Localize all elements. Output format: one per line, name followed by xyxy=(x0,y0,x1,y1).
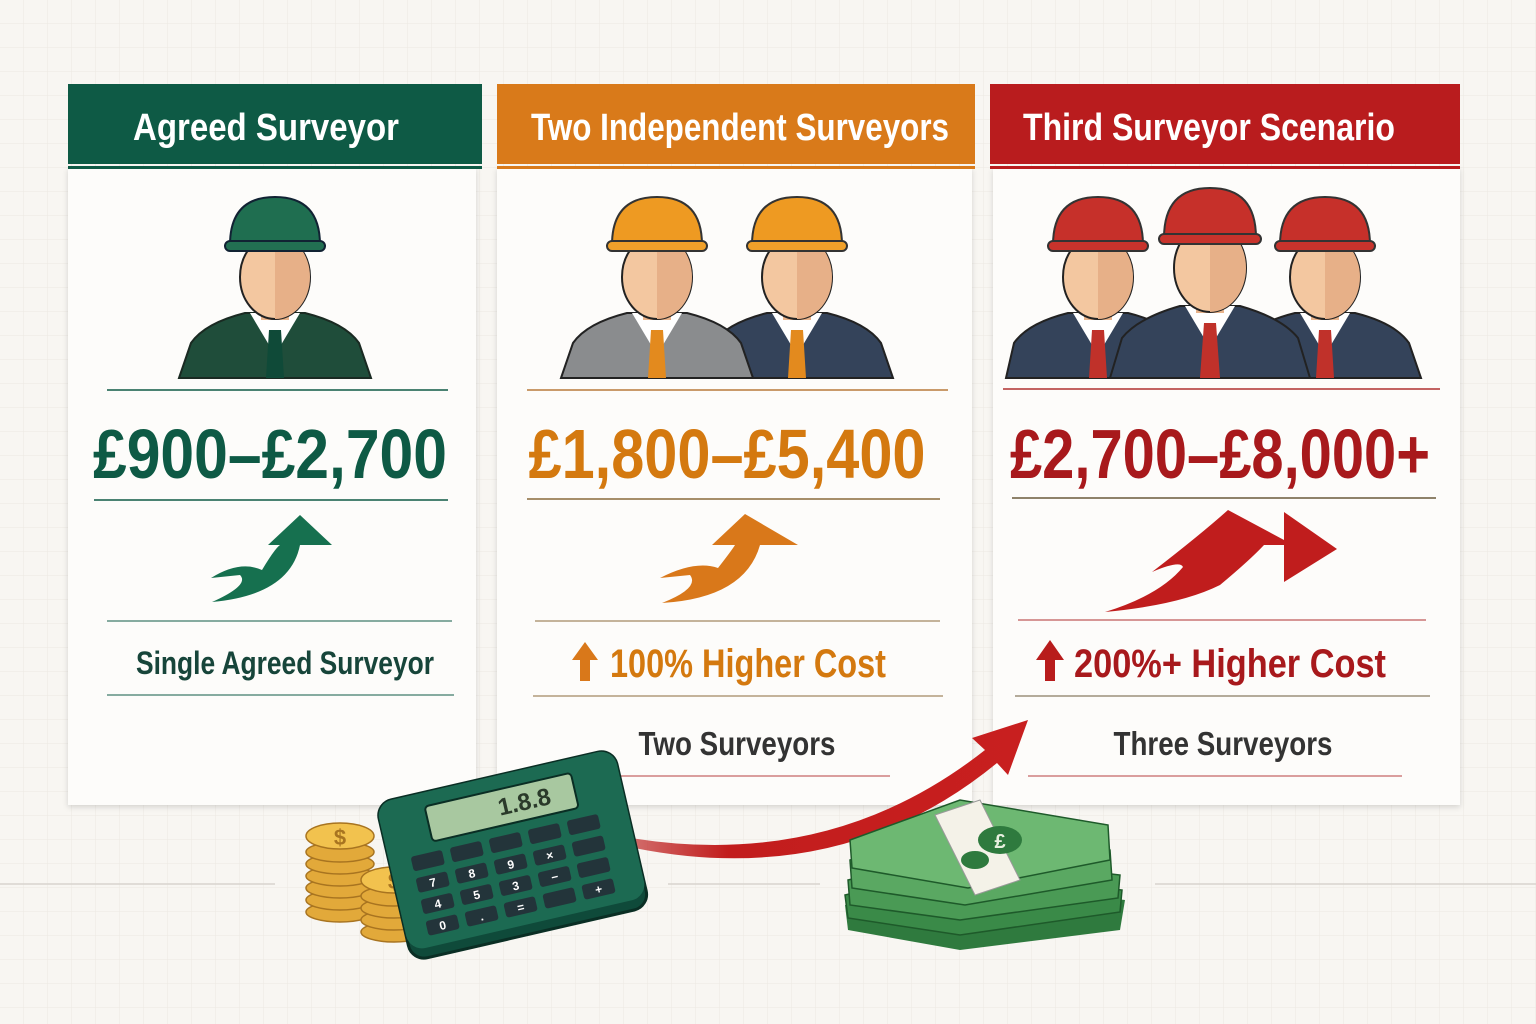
heading: third surveyor: Third Surveyor Scenario xyxy=(1023,107,1395,149)
icon: calculator: 5 xyxy=(472,887,482,903)
heading: agreed surveyor xyxy=(68,84,482,169)
heading: agreed surveyor: Agreed Surveyor xyxy=(133,107,399,149)
icon: calculator: 8 xyxy=(467,866,477,881)
heading: two independent xyxy=(497,84,975,169)
price: agreed: £900–£2,700 xyxy=(93,415,447,493)
icon: green up arrow xyxy=(211,515,332,602)
icon: three red surveyors xyxy=(1006,188,1421,378)
label: three surveyors: Three Surveyors xyxy=(1114,725,1332,762)
icon: calculator: 0 xyxy=(438,918,448,933)
icon: money stack xyxy=(845,800,1125,950)
icon: coins xyxy=(306,823,427,942)
label: 200%+ higher cost: 200%+ Higher Cost xyxy=(1074,642,1386,686)
icon: calculator: 9 xyxy=(506,857,516,872)
label: single agreed surveyor: Single Agreed Surveyor xyxy=(136,645,434,681)
panel: two independent surveyors xyxy=(497,84,975,805)
price: two: £1,800–£5,400 xyxy=(528,415,926,493)
arrow: big red rising arrow xyxy=(600,720,1028,858)
icon: red right arrow xyxy=(1105,510,1337,612)
heading: two independent: Two Independent Surveyors xyxy=(531,107,949,149)
icon: calculator: 4 xyxy=(433,896,443,912)
icon: calculator: 1.8.8 xyxy=(495,783,554,822)
panel: third surveyor scenario xyxy=(990,84,1460,805)
icon: green surveyor xyxy=(179,197,371,378)
heading: third surveyor xyxy=(990,84,1460,169)
icon: calculator: + xyxy=(594,882,604,897)
icon: calculator: 3 xyxy=(511,878,521,894)
label: 100% higher cost: 100% Higher Cost xyxy=(610,642,886,686)
icon: calculator: − xyxy=(550,869,560,885)
icon: calculator: . xyxy=(479,909,485,924)
icon: calculator: = xyxy=(516,900,526,915)
label: two surveyors: Two Surveyors xyxy=(638,725,836,762)
icon: coins: $ xyxy=(334,825,346,850)
icon: two orange surveyors xyxy=(561,197,893,378)
icon: calculator: × xyxy=(545,848,555,863)
icon: money stack: £ xyxy=(994,831,1006,853)
icon: calculator: 7 xyxy=(428,875,438,890)
icon: calculator xyxy=(376,749,650,961)
price: third: £2,700–£8,000+ xyxy=(1010,415,1430,493)
icon: coins: $ xyxy=(388,869,400,894)
panel: agreed surveyor xyxy=(68,84,482,805)
icon: orange up arrow xyxy=(660,514,798,603)
